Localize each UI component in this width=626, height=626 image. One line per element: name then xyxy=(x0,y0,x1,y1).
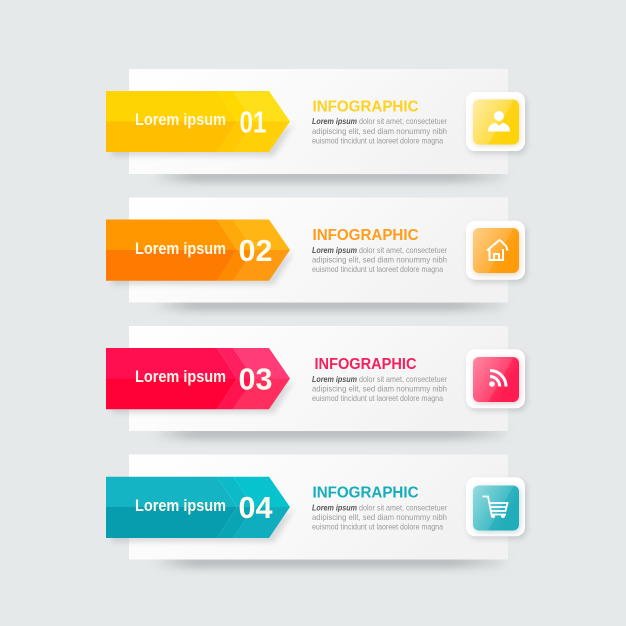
text block: euismod tincidunt ut laoreet dolore magna xyxy=(312,264,443,274)
arrow banner: Lorem ipsum xyxy=(135,368,226,386)
panel: card xyxy=(129,69,508,174)
arrow banner: Lorem ipsum xyxy=(135,111,226,129)
arrow banner: 03 xyxy=(238,362,272,396)
text block: adipiscing elit, sed diam nonummy nibh xyxy=(312,512,447,522)
text block: Lorem ipsum dolor sit amet, consectetuer xyxy=(312,502,447,512)
arrow banner xyxy=(106,477,294,542)
heading: INFOGRAPHIC xyxy=(312,484,418,502)
icon: shopping cart xyxy=(466,477,527,539)
text block: adipiscing elit, sed diam nonummy nibh xyxy=(312,384,447,394)
icon: rss xyxy=(466,349,527,411)
heading: INFOGRAPHIC xyxy=(312,98,418,116)
text block xyxy=(312,116,447,146)
panel: card xyxy=(129,198,508,302)
text block: Lorem ipsum dolor sit amet, consectetuer xyxy=(312,245,447,255)
text block: Lorem ipsum dolor sit amet, consectetuer xyxy=(312,116,447,126)
panel: card xyxy=(129,326,508,431)
panel: card xyxy=(129,454,508,560)
card shadow xyxy=(150,556,508,568)
text block: adipiscing elit, sed diam nonummy nibh xyxy=(312,126,447,136)
icon: house xyxy=(466,221,527,282)
arrow banner: 01 xyxy=(240,104,266,140)
icon: user xyxy=(466,92,527,154)
card shadow xyxy=(150,427,508,439)
text block xyxy=(312,245,447,274)
arrow banner: Lorem ipsum xyxy=(135,240,226,258)
text block xyxy=(312,374,447,403)
text block: adipiscing elit, sed diam nonummy nibh xyxy=(312,254,447,264)
arrow banner xyxy=(106,348,294,413)
card shadow xyxy=(150,170,508,182)
row 3: red xyxy=(106,326,527,439)
arrow banner: 02 xyxy=(238,233,272,268)
card shadow xyxy=(150,298,508,310)
row 4: teal xyxy=(106,454,527,568)
text block: Lorem ipsum dolor sit amet, consectetuer xyxy=(312,374,447,384)
heading: INFOGRAPHIC xyxy=(314,356,416,373)
arrow banner: Lorem ipsum xyxy=(135,497,226,515)
text block: euismod tincidunt ut laoreet dolore magna xyxy=(312,393,443,403)
heading: INFOGRAPHIC xyxy=(312,227,418,244)
arrow banner xyxy=(106,220,294,285)
text block xyxy=(312,502,447,532)
text block: euismod tincidunt ut laoreet dolore magna xyxy=(312,136,443,146)
row 1: yellow xyxy=(106,69,527,182)
text block: euismod tincidunt ut laoreet dolore magna xyxy=(312,522,443,532)
arrow banner xyxy=(106,91,294,156)
row 2: orange xyxy=(106,198,527,310)
arrow banner: 04 xyxy=(238,490,273,525)
